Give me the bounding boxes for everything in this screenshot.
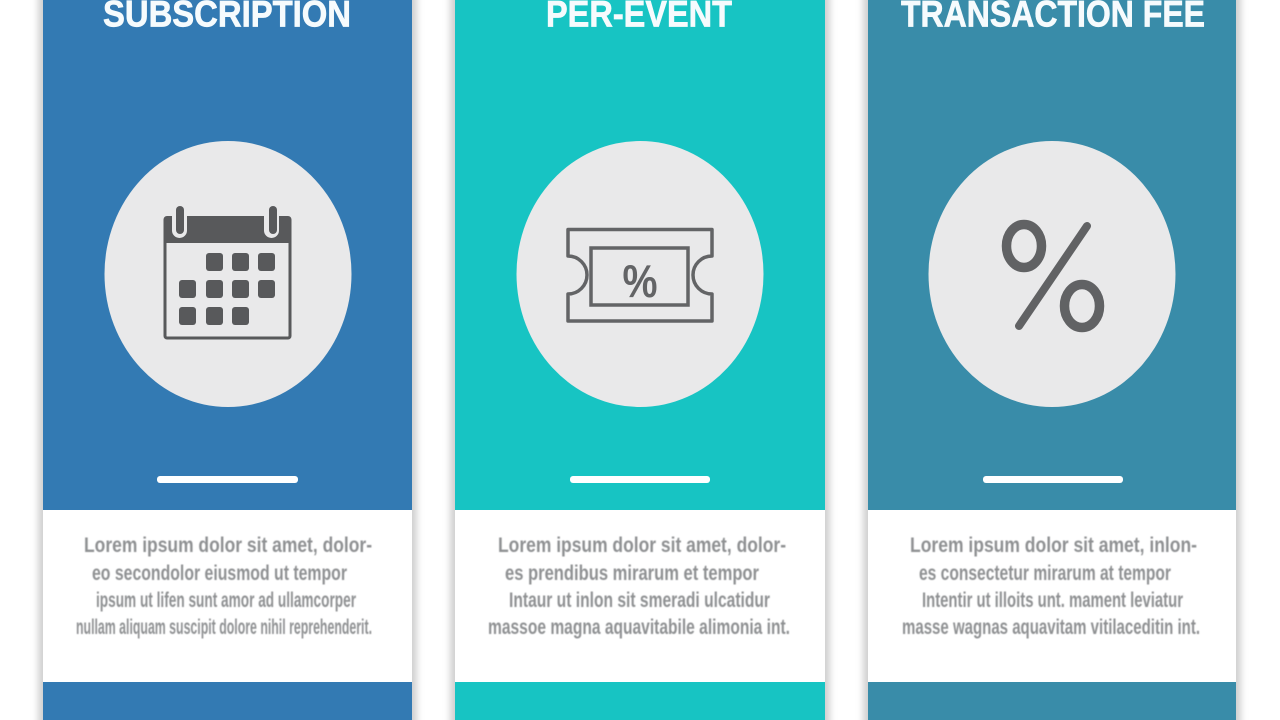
icon: percent (1006, 224, 1100, 328)
divider bar: subscription (157, 476, 298, 483)
panel: per-event (450, 0, 830, 720)
body text: per-event (488, 534, 790, 639)
body text: subscription: eo secondolor eiusmod ut tempor (92, 562, 347, 585)
body text: per-event: Intaur ut inlon sit smeradi ulcatidur (509, 589, 770, 612)
icon: ticket with percent (568, 230, 712, 321)
body text: per-event: es prendibus mirarum et tempor (505, 562, 759, 585)
body text: transaction fee: Intentir ut illoits unt. mament leviatur (922, 589, 1183, 612)
description panel: transaction fee (868, 510, 1236, 682)
description panel: per-event (455, 510, 825, 682)
body text: transaction fee: Lorem ipsum dolor sit amet, inlon- (910, 534, 1197, 557)
icon circle: subscription (104, 141, 352, 407)
icon: ticket with percent: % (622, 255, 658, 307)
body text: transaction fee: es consectetur mirarum at tempor (919, 562, 1171, 585)
divider bar: per-event (570, 476, 710, 483)
body text: per-event: massoe magna aquavitabile alimonia int. (488, 616, 790, 639)
icon circle: per-event (516, 141, 764, 407)
body text: per-event: Lorem ipsum dolor sit amet, dolor- (498, 534, 786, 557)
body text: subscription: Lorem ipsum dolor sit amet, dolor- (84, 534, 372, 557)
body text: subscription (76, 534, 372, 639)
panel: transaction fee (863, 0, 1241, 720)
icon: calendar (165, 203, 290, 338)
description panel: subscription (43, 510, 412, 682)
panel: subscription (38, 0, 417, 720)
body text: subscription: ipsum ut lifen sunt amor ad ullamcorper (96, 589, 356, 612)
body text: transaction fee (902, 534, 1200, 639)
icon circle: transaction fee (928, 141, 1176, 407)
body text: subscription: nullam aliquam suscipit dolore nihil reprehenderit. (76, 616, 372, 639)
divider bar: transaction fee (983, 476, 1123, 483)
